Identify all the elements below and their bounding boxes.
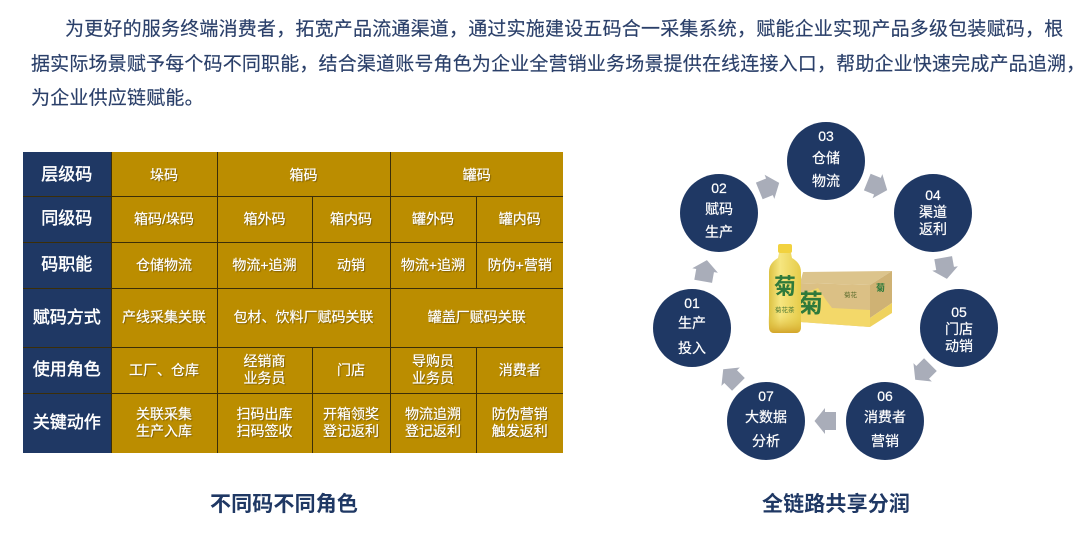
row: user roles: 消费者	[499, 362, 541, 378]
product: chrysanthemum tea bottle and carton: 菊花	[844, 290, 858, 299]
row: key actions: 关键动作	[33, 413, 101, 432]
row: key actions: 登记返利	[323, 423, 379, 439]
row: key actions: 关联采集	[136, 406, 192, 422]
step 02: coding production	[680, 174, 758, 252]
step 03: warehouse logistics: 仓储	[812, 150, 840, 166]
row: hierarchy code: 层级码	[41, 165, 92, 184]
row: hierarchy code: 垛码	[150, 167, 178, 183]
row: hierarchy code	[23, 152, 563, 453]
row: coding method: 赋码方式	[33, 308, 101, 326]
row: key actions: 登记返利	[405, 423, 461, 439]
step 04: channel rebate	[894, 174, 972, 252]
step 06: consumer marketing: 消费者	[864, 409, 906, 425]
step 03: warehouse logistics	[787, 122, 865, 200]
product: chrysanthemum tea bottle and carton: 菊花茶	[775, 305, 795, 314]
row: key actions	[23, 394, 563, 453]
product: chrysanthemum tea bottle and carton: 菊	[774, 274, 796, 299]
step 07: big data analysis	[727, 382, 805, 460]
step 04: channel rebate: 04	[925, 187, 941, 203]
product: chrysanthemum tea bottle and carton: 菊	[876, 282, 885, 293]
row: key actions: 扫码签收	[236, 423, 292, 439]
row: hierarchy code: 箱码	[290, 167, 318, 183]
row: key actions: 开箱领奖	[323, 406, 379, 422]
step 07: big data analysis: 07	[758, 388, 774, 404]
row: coding method: 产线采集关联	[122, 309, 206, 325]
product: chrysanthemum tea bottle and carton: 菊	[798, 290, 823, 318]
row: code function: 码职能	[41, 255, 92, 274]
step 06: consumer marketing: 06	[877, 388, 893, 404]
step 02: coding production: 02	[711, 180, 727, 196]
step 02: coding production: 生产	[705, 224, 733, 240]
step 02: coding production: 赋码	[705, 201, 733, 217]
row: hierarchy code: 罐码	[463, 167, 491, 183]
step 03: warehouse logistics: 03	[818, 128, 834, 144]
heading: different codes different roles: 不同码不同角色	[210, 493, 358, 516]
row: coding method	[23, 289, 563, 347]
step 05: store sell-through: 门店	[945, 321, 973, 337]
step 04: channel rebate: 渠道	[919, 204, 947, 220]
row: code function	[23, 243, 563, 288]
intro paragraph	[31, 18, 1085, 109]
row: user roles	[23, 348, 563, 393]
row: key actions: 触发返利	[492, 423, 548, 439]
row: same-level code: 箱码/垛码	[134, 210, 194, 226]
heading: full-chain profit sharing: 全链路共享分润	[762, 493, 910, 516]
row: user roles: 业务员	[244, 370, 286, 386]
step 01: production input: 01	[684, 295, 700, 311]
row: key actions: 扫码出库	[236, 406, 292, 422]
row: key actions: 防伪营销	[492, 406, 548, 422]
step 01: production input: 投入	[678, 340, 706, 356]
row: coding method: 罐盖厂赋码关联	[428, 309, 526, 325]
row: user roles: 工厂、仓库	[129, 362, 199, 378]
step 01: production input: 生产	[678, 315, 706, 331]
step 05: store sell-through: 05	[951, 304, 967, 320]
row: same-level code: 箱内码	[330, 210, 372, 226]
row: code function: 防伪+营销	[488, 256, 552, 272]
step 07: big data analysis: 大数据	[745, 409, 787, 425]
row: user roles: 使用角色	[33, 360, 101, 379]
row: key actions: 生产入库	[136, 423, 192, 439]
step 05: store sell-through: 动销	[945, 338, 973, 354]
row: same-level code	[23, 197, 563, 242]
step 05: store sell-through	[920, 289, 998, 367]
step 04: channel rebate: 返利	[919, 221, 947, 237]
row: code function: 物流+追溯	[232, 256, 297, 272]
row: same-level code: 箱外码	[244, 210, 286, 226]
row: user roles: 导购员	[412, 353, 454, 369]
row: code function: 物流+追溯	[401, 256, 465, 272]
row: user roles: 门店	[337, 362, 365, 378]
step 03: warehouse logistics: 物流	[812, 173, 840, 189]
code role table	[23, 152, 563, 453]
step 07: big data analysis: 分析	[752, 433, 780, 449]
row: same-level code: 同级码	[41, 209, 92, 228]
intro paragraph: 为更好的服务终端消费者，拓宽产品流通渠道，通过实施建设五码合一采集系统，赋能企业实现产品多级包装赋码，根	[65, 19, 1063, 40]
row: same-level code: 罐内码	[499, 210, 541, 226]
step 06: consumer marketing: 营销	[871, 433, 899, 449]
row: code function: 动销	[337, 256, 365, 272]
row: key actions: 物流追溯	[405, 406, 461, 422]
row: same-level code: 罐外码	[412, 210, 454, 226]
step 01: production input	[653, 289, 731, 367]
step 06: consumer marketing	[846, 382, 924, 460]
intro paragraph: 为企业供应链赋能。	[31, 88, 204, 109]
row: code function: 仓储物流	[136, 256, 192, 272]
row: user roles: 业务员	[412, 370, 454, 386]
row: user roles: 经销商	[244, 353, 286, 369]
intro paragraph: 据实际场景赋予每个码不同职能，结合渠道账号角色为企业全营销业务场景提供在线连接入口，帮助企业快速完成产品追溯，	[31, 54, 1085, 75]
row: coding method: 包材、饮料厂赋码关联	[234, 309, 374, 325]
